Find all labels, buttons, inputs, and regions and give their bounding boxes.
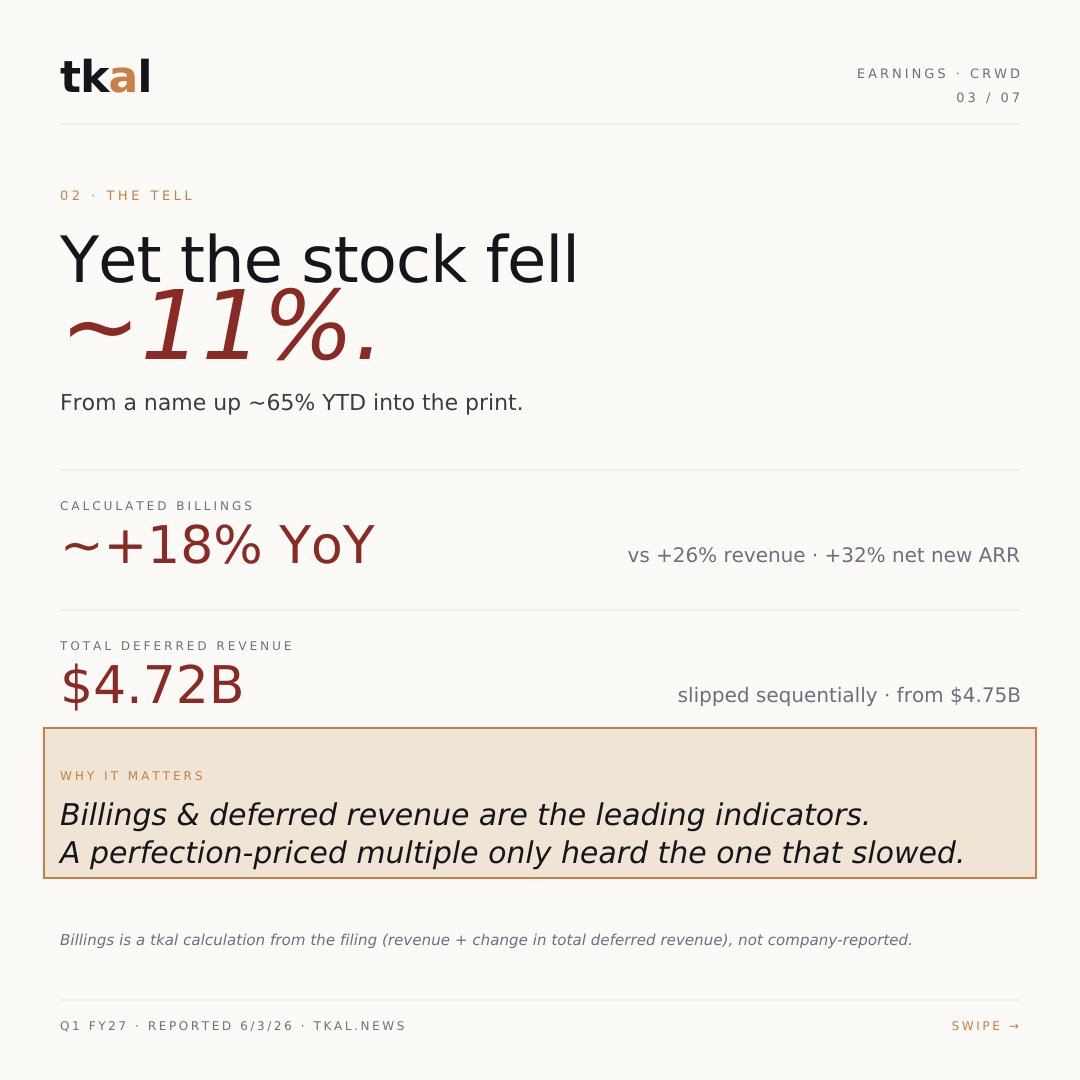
metric label: CALCULATED BILLINGS: [60, 499, 255, 513]
metric value: $4.72B: [60, 656, 245, 716]
metric label: TOTAL DEFERRED REVENUE: [60, 639, 294, 653]
callout: why it matters: [43, 727, 1037, 879]
footer source: Q1 FY27 · REPORTED 6/3/26 · TKAL.NEWS: [60, 1019, 407, 1033]
callout label: WHY IT MATTERS: [60, 769, 205, 783]
metric comparison: slipped sequentially · from $4.75B: [678, 683, 1021, 707]
callout text: [58, 798, 965, 871]
section label: 02 · THE TELL: [60, 189, 195, 204]
callout text: A perfection-priced multiple only heard the one that slowed.: [60, 836, 965, 871]
headline figure: ~11%.: [60, 270, 384, 382]
headline: Yet the stock fell: [60, 224, 579, 298]
logo: tkal: [60, 52, 152, 103]
footnote: Billings is a tkal calculation from the filing (revenue + change in total deferred revenue), not company-reported.: [60, 931, 913, 949]
subheading: From a name up ~65% YTD into the print.: [60, 391, 524, 416]
header meta: EARNINGS · CRWD: [857, 67, 1023, 82]
callout text: Billings & deferred revenue are the leading indicators.: [60, 798, 871, 833]
metric: total deferred revenue: [60, 639, 1021, 716]
metric value: ~+18% YoY: [60, 516, 375, 576]
header meta: 03 / 07: [956, 91, 1023, 106]
metric: calculated billings: [60, 499, 1020, 576]
header meta: [857, 67, 1023, 106]
metric comparison: vs +26% revenue · +32% net new ARR: [628, 543, 1020, 567]
swipe prompt: SWIPE →: [952, 1019, 1022, 1033]
